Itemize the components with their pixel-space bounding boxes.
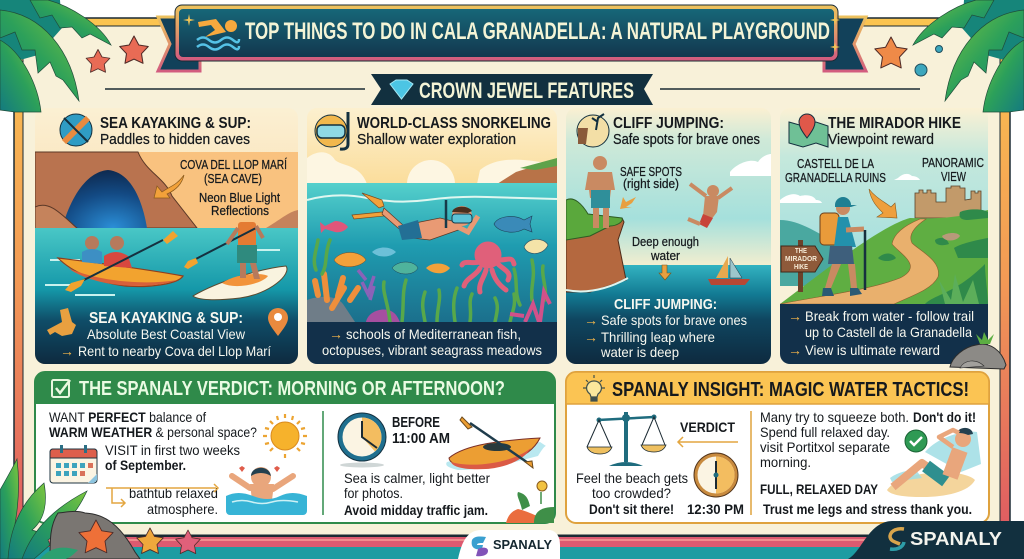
- illustration: relaxing man: [887, 428, 981, 497]
- sign: mirador hike: [781, 240, 823, 292]
- illustration: hiker: [820, 197, 865, 296]
- text: cliff jumping labels: water is deep: [600, 344, 679, 360]
- text: insight right: Many try to squeeze both.: [760, 409, 909, 425]
- icon: map pin: [789, 114, 828, 147]
- text: before 11:00: [392, 414, 450, 447]
- text: feel the beach: too crowded?: [592, 485, 671, 501]
- panel: sea kayaking and SUP: [35, 108, 298, 364]
- sign: mirador hike: HIKE: [794, 264, 808, 271]
- arrows: [620, 197, 636, 209]
- text: mirador labels: →: [788, 308, 802, 324]
- text: mirador labels: up to Castell de la Granadella: [805, 324, 972, 340]
- text: snorkeling labels: [315, 112, 551, 358]
- icon: scales: [587, 412, 666, 466]
- icon: caption paddle: [47, 308, 76, 336]
- text: snorkeling labels: →: [329, 326, 343, 342]
- illustration: flowers: [506, 481, 554, 523]
- text: sea kayaking labels: Paddles to hidden caves: [100, 131, 250, 148]
- text: insight right: Spend full relaxed day.: [760, 424, 890, 440]
- text: mirador labels: View is ultimate reward: [805, 342, 940, 358]
- text: mirador labels: [785, 114, 984, 358]
- section banner: crown jewel features: [105, 74, 920, 105]
- bottom-left foliage and rock: [0, 459, 200, 559]
- illustration: man in water: [226, 466, 307, 515]
- text: sea calmer: Sea is calmer, light better: [344, 470, 490, 486]
- panel: mirador hike: [780, 108, 988, 364]
- text: mirador labels: VIEW: [941, 169, 967, 184]
- text: cliff jumping labels: →: [584, 329, 598, 345]
- text: snorkeling labels: schools of Mediterranean fish,: [346, 326, 521, 342]
- heading: THE SPANALY VERDICT: MORNING OR AFTERNOON?: [79, 378, 505, 400]
- text: verdict left: [49, 409, 257, 517]
- illustration: cliff: [566, 199, 628, 292]
- text: before 11:00: BEFORE: [392, 414, 440, 431]
- text: insight right: Trust me legs and stress thank you.: [763, 501, 972, 517]
- panel: cliff jumping: [566, 108, 771, 364]
- illustration: sailboat: [708, 256, 750, 285]
- text: cliff jumping labels: SAFE SPOTS: [620, 164, 682, 179]
- text: sea kayaking labels: Neon Blue Light: [199, 190, 280, 205]
- text: mirador labels: CASTELL DE LA: [797, 156, 874, 171]
- palm leaves: top-right: [913, 0, 1024, 112]
- icon: clock before 11: [338, 413, 386, 468]
- illustration: standing man: [585, 156, 615, 228]
- text: mirador labels: GRANADELLA RUINS: [785, 170, 886, 185]
- icon: location pin: [268, 308, 288, 336]
- icon: snorkel mask: [315, 112, 348, 149]
- illustration: seabed: [307, 240, 550, 322]
- icon: spanaly gold mark: [890, 529, 904, 549]
- illustration: green hills and trail: [780, 209, 988, 304]
- text: insight right: Don't do it!: [913, 409, 976, 425]
- text: sea calmer: for photos.: [344, 485, 403, 501]
- illustration: octopus: [462, 244, 514, 292]
- text: mirador labels: Break from water - follow trail: [805, 308, 974, 324]
- text: sea kayaking labels: SEA KAYAKING & SUP:: [100, 115, 251, 132]
- panel: spanaly verdict: [35, 372, 555, 523]
- caption strip: [307, 322, 557, 364]
- caption strip: [780, 304, 988, 364]
- icon: cliff badge: [577, 114, 609, 147]
- text: feel the beach: Don't sit there!: [589, 501, 674, 517]
- icon: spanaly mark: [472, 536, 488, 556]
- section heading: CROWN JEWEL FEATURES: [419, 78, 634, 103]
- text: mirador labels: Viewpoint reward: [828, 131, 934, 148]
- illustration: sea cave: [35, 152, 298, 229]
- text: sea kayaking labels: [60, 114, 287, 359]
- text: feel the beach: Feel the beach gets: [576, 470, 688, 486]
- illustration: kayak with paddlers: [58, 231, 183, 292]
- title banner: [158, 5, 866, 71]
- text: cliff jumping labels: Safe spots for brave ones: [613, 131, 760, 148]
- decorative rocks: [950, 332, 1006, 369]
- text: cliff jumping labels: Deep enough: [632, 234, 699, 249]
- text: mirador labels: THE MIRADOR HIKE: [828, 115, 961, 132]
- icon: calendar: [50, 445, 97, 483]
- illustration: snorkeler: [352, 193, 478, 240]
- text: sea calmer: Avoid midday traffic jam.: [344, 502, 488, 518]
- palm leaves: top-left: [0, 0, 111, 112]
- text: insight right: visit Portitxol separate: [760, 439, 890, 455]
- panel: snorkeling: [307, 108, 557, 364]
- text: snorkeling labels: WORLD-CLASS SNORKELING: [357, 115, 551, 132]
- logo badge: bottom-right: [848, 521, 1024, 559]
- text: insight right: FULL, RELAXED DAY: [760, 481, 879, 497]
- illustration: castle: [915, 186, 981, 218]
- text: sea kayaking labels: Rent to nearby Cova del Llop Marí: [78, 343, 271, 359]
- text: cliff jumping labels: →: [584, 312, 598, 328]
- text: verdict left: bathtub relaxed: [129, 485, 218, 501]
- text: sea kayaking labels: Absolute Best Coastal View: [87, 326, 246, 342]
- illustration: kayak: [446, 417, 546, 470]
- icon: light bulb: [583, 375, 605, 401]
- label: verdict with arrow: [678, 419, 738, 447]
- label: 12:30 PM: 12:30 PM: [687, 501, 744, 517]
- arrow: bathtub: [106, 484, 218, 507]
- text: sea calmer: [344, 470, 490, 518]
- illustration: fish: [320, 216, 548, 274]
- text: sea kayaking labels: COVA DEL LLOP MARÍ: [180, 157, 287, 172]
- text: feel the beach: [576, 470, 688, 517]
- sign: mirador hike: THE: [795, 248, 807, 255]
- text: verdict left: atmosphere.: [147, 501, 218, 517]
- starfish: top left pair: [86, 36, 148, 72]
- text: cliff jumping labels: Safe spots for brave ones: [601, 312, 747, 328]
- panel: spanaly insight: [566, 372, 989, 523]
- text: cliff jumping labels: CLIFF JUMPING:: [614, 296, 717, 313]
- sign: mirador hike: MIRADOR: [785, 256, 817, 263]
- logo text: SPANALY: [910, 529, 1002, 549]
- icon: kayak badge: [60, 114, 92, 146]
- text: snorkeling labels: Shallow water exploration: [357, 131, 516, 148]
- text: verdict left: of September.: [105, 457, 186, 473]
- illustration: jumping man: [688, 184, 732, 228]
- text: cliff jumping labels: [577, 114, 760, 360]
- icon: swimmer: [197, 19, 239, 50]
- icon: checkbox: [52, 380, 70, 397]
- text: sea kayaking labels: SEA KAYAKING & SUP:: [89, 310, 243, 327]
- arrow: [869, 189, 897, 218]
- text: cliff jumping labels: (right side): [623, 176, 679, 191]
- label: verdict with arrow: VERDICT: [680, 419, 735, 435]
- text: verdict left: WANT PERFECT balance of: [49, 409, 206, 425]
- text: cliff jumping labels: Thrilling leap where: [601, 329, 715, 345]
- text: insight right: [760, 409, 976, 517]
- text: sea kayaking labels: (SEA CAVE): [204, 171, 262, 186]
- logo badge: centre: [458, 530, 560, 559]
- starfish and bubbles: top right: [875, 37, 942, 76]
- text: verdict left: VISIT in first two weeks: [105, 442, 240, 458]
- logo text: SPANALY: [493, 537, 552, 552]
- text: before 11:00: 11:00 AM: [392, 430, 450, 447]
- text: cliff jumping labels: CLIFF JUMPING:: [613, 115, 724, 132]
- text: sea kayaking labels: Reflections: [211, 203, 269, 218]
- icon: diamond: [390, 80, 413, 99]
- text: sea kayaking labels: →: [60, 343, 74, 359]
- icon: clock 12:30: [694, 453, 738, 497]
- illustration: paddleboarder: [184, 222, 287, 300]
- text: mirador labels: PANORAMIC: [922, 155, 984, 170]
- text: mirador labels: →: [788, 342, 802, 358]
- text: verdict left: WARM WEATHER & personal space?: [49, 424, 257, 440]
- text: cliff jumping labels: water: [650, 248, 681, 263]
- text: insight right: morning.: [760, 454, 811, 470]
- text: snorkeling labels: octopuses, vibrant seagrass meadows: [322, 342, 542, 358]
- icon: sun: [263, 414, 307, 458]
